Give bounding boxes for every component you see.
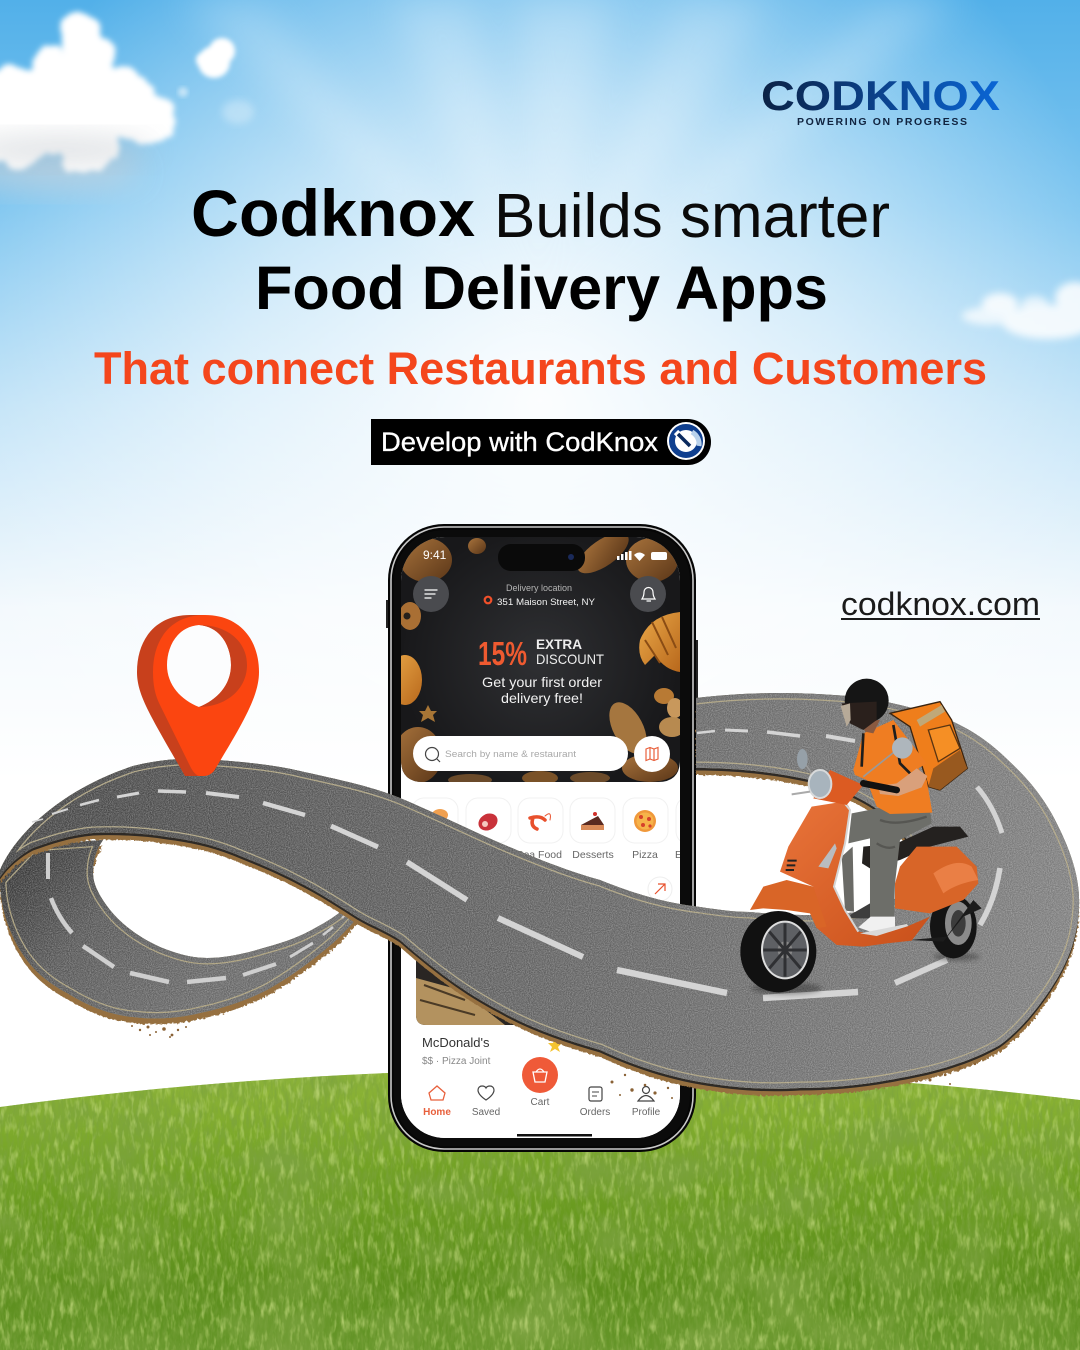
tab: profile	[632, 1086, 660, 1115]
title	[191, 176, 890, 322]
icon: meat	[478, 814, 498, 830]
delivery location	[484, 584, 595, 606]
scooter front and mirrors	[792, 737, 913, 805]
rider torso	[853, 720, 932, 814]
tab: home	[423, 1086, 451, 1118]
logo tagline: POWERING ON PROGRESS	[797, 116, 967, 128]
road: main band and right loop	[0, 680, 1080, 1100]
map button	[634, 736, 670, 772]
delivery location: 351 Maison Street, NY	[497, 597, 596, 608]
cloud: top left large	[0, 12, 176, 190]
restaurant details: McDonald's	[422, 1035, 490, 1050]
title: Codknox	[191, 176, 475, 250]
icon: cake	[581, 812, 604, 830]
call to action button: Develop with CodKnox	[381, 427, 659, 457]
rider helmet	[841, 679, 889, 733]
tab: cart: Cart	[531, 1097, 550, 1108]
delivery location: Delivery location	[506, 583, 572, 593]
call to action button	[371, 419, 711, 465]
tab: cart	[522, 1057, 558, 1108]
delivery rider on scooter	[740, 679, 982, 994]
icon: codknox badge	[667, 422, 705, 460]
cloud: small top	[178, 38, 254, 124]
arrow button	[648, 877, 672, 901]
road: back left loop	[0, 840, 358, 1025]
discount promo: EXTRA	[536, 636, 582, 652]
website link: codknox.com	[841, 586, 1040, 622]
tab: orders: Orders	[580, 1107, 610, 1118]
logo wordmark: CODKNOX	[761, 72, 1000, 119]
app header banner	[401, 537, 680, 782]
delivery backpack	[890, 702, 967, 790]
grass field	[0, 1073, 1080, 1350]
restaurant photo card	[416, 960, 514, 1025]
status bar	[423, 544, 667, 571]
logo: Codknox	[761, 72, 1000, 128]
lane dashes: back loop	[48, 853, 347, 982]
menu button	[413, 576, 449, 612]
search bar	[413, 736, 628, 771]
discount promo	[478, 635, 604, 706]
front wheel	[740, 911, 816, 992]
phone mockup	[386, 524, 698, 1152]
search bar: Search by name & restaurant	[445, 749, 576, 760]
subtitle: That connect Restaurants and Customers	[94, 343, 987, 394]
food decorations	[401, 537, 680, 782]
tab: saved: Saved	[472, 1107, 500, 1118]
discount promo: 15%	[478, 635, 527, 672]
tab: saved	[472, 1086, 500, 1118]
discount promo: delivery free!	[501, 690, 583, 706]
cloud: right	[962, 282, 1080, 339]
food categories: Desserts	[572, 849, 614, 861]
notification button	[630, 576, 666, 612]
tab: orders	[580, 1087, 610, 1118]
tab: home: Home	[423, 1107, 451, 1118]
phone frame	[386, 524, 698, 1152]
food categories	[412, 798, 696, 861]
title: Builds smarter	[494, 182, 890, 251]
location pin	[137, 615, 259, 776]
food categories: Pizza	[632, 849, 658, 861]
restaurant details	[422, 1038, 561, 1065]
discount promo: Get your first order	[482, 674, 602, 690]
tab: profile: Profile	[632, 1107, 661, 1118]
food categories: Sea Food	[516, 849, 562, 861]
title: Food Delivery Apps	[255, 254, 828, 322]
icon: shrimp	[530, 814, 550, 829]
rear wheel	[910, 895, 982, 958]
far leg	[842, 847, 854, 912]
rider legs	[848, 807, 932, 936]
scooter body	[750, 802, 978, 947]
status bar: 9:41	[423, 548, 447, 562]
icon: pizza	[634, 810, 656, 832]
discount promo: DISCOUNT	[536, 651, 604, 667]
scooter seat	[862, 827, 968, 868]
restaurant details: $$ · Pizza Joint	[422, 1056, 491, 1067]
dirt crumbs	[131, 1025, 989, 1099]
lane dashes: main band	[32, 730, 1002, 998]
bottom tab bar	[401, 1057, 680, 1140]
food categories: E	[675, 849, 682, 861]
